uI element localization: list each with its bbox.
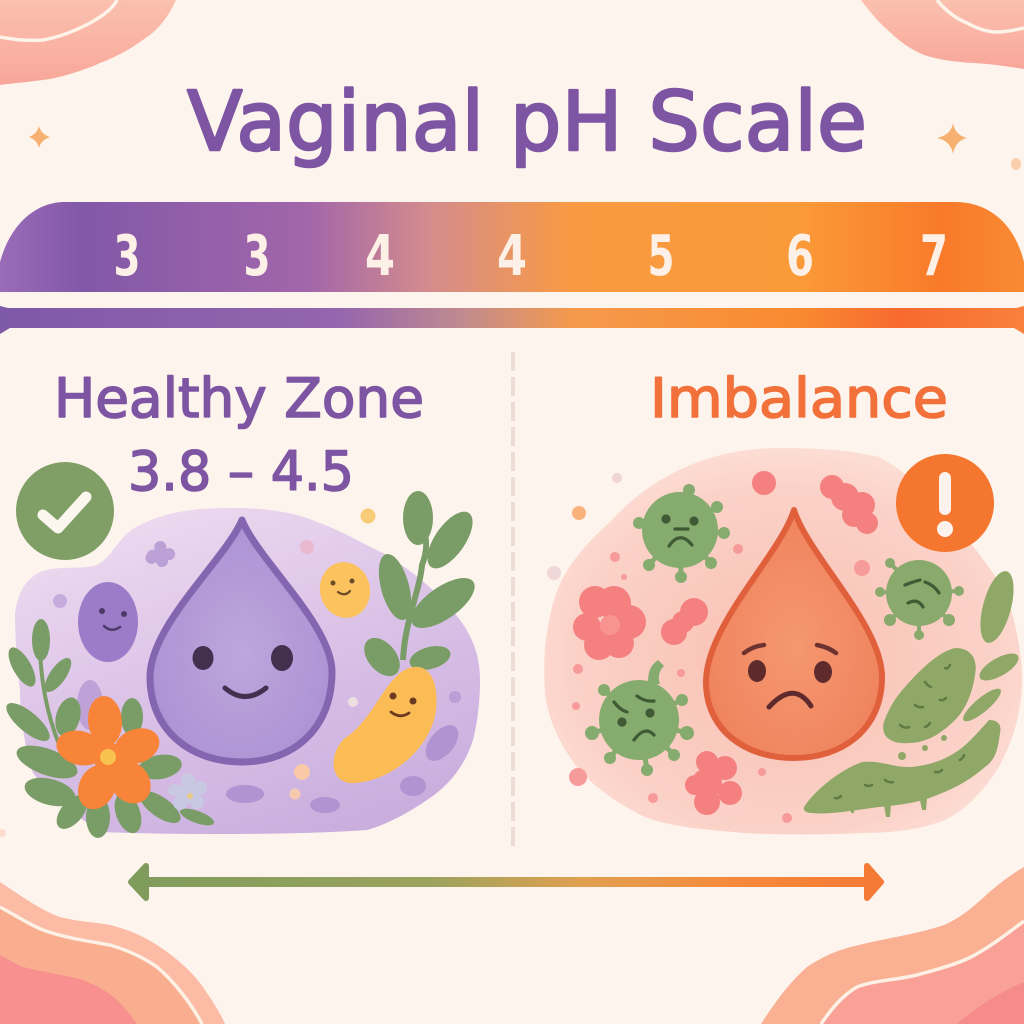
scale numbers: 6 (786, 224, 814, 289)
icon: pink clusters (573, 471, 878, 815)
corner waves: bottom right (761, 867, 1024, 1024)
germ faces (614, 516, 939, 740)
icon: right plant (357, 491, 482, 683)
scale numbers: 4 (497, 224, 527, 289)
title: Vaginal pH Scale (187, 75, 867, 170)
scale numbers: 4 (365, 224, 395, 289)
scale numbers: 5 (648, 224, 674, 289)
icon: sad drop (706, 510, 882, 758)
healthy range: 3.8 – 4.5 (128, 440, 354, 503)
panel: imbalance blob (544, 448, 1023, 834)
heading: imbalance: Imbalance (650, 367, 948, 430)
corner waves: bottom left (0, 882, 225, 1024)
double arrow (131, 866, 881, 898)
scale numbers: 7 (920, 224, 948, 289)
corner waves: top left (0, 0, 176, 85)
pale flower (168, 773, 207, 810)
icon: green plant and bacteria (804, 568, 1023, 817)
icon: check badge (16, 462, 114, 560)
heading: healthy zone: Healthy Zone (54, 367, 424, 430)
pH scale bar (0, 202, 1024, 292)
sparkles (29, 123, 1021, 170)
icon: yellow bean (334, 667, 437, 783)
scale numbers: 3 (114, 224, 140, 289)
small dots (547, 473, 870, 823)
scale numbers (114, 224, 948, 289)
icon: happy drop (150, 520, 332, 762)
lower scale line (0, 306, 1024, 334)
icon: smiling yellow dot (315, 557, 375, 623)
scale numbers: 3 (244, 224, 270, 289)
orange flower (52, 695, 164, 815)
icon: smiling microbe (78, 582, 138, 662)
bacteria spots (835, 665, 964, 798)
zone divider (511, 352, 515, 852)
icon: green germs (585, 484, 964, 776)
icon: alert badge (896, 454, 994, 552)
panel: healthy blob (0, 491, 482, 838)
corner waves: top right (861, 0, 1024, 69)
icon: left plant and flower (1, 619, 216, 838)
small bubbles (0, 508, 465, 837)
